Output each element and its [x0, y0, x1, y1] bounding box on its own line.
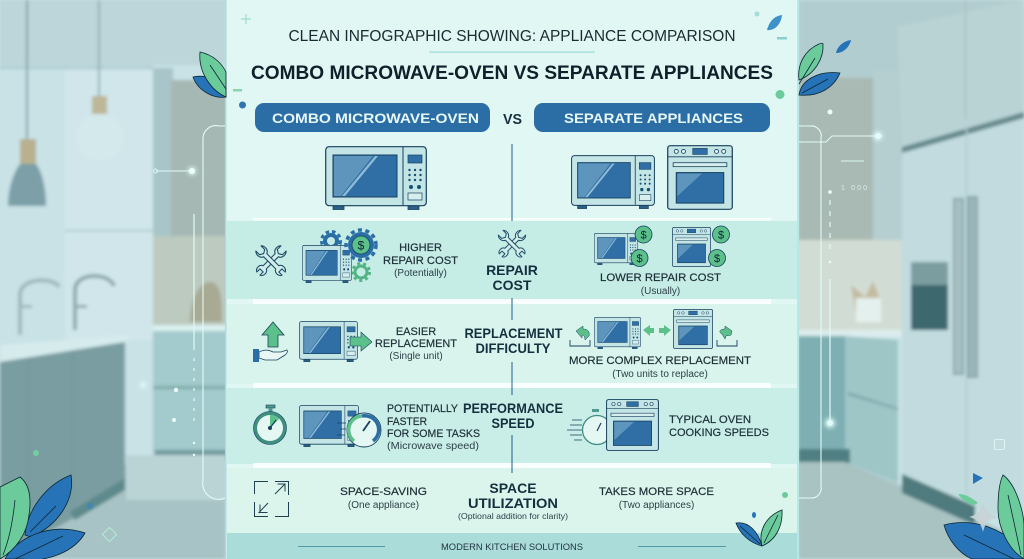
leaves bottom right	[944, 475, 1024, 559]
text: typical oven: TYPICAL OVEN	[669, 414, 751, 426]
heading: performance speed: PERFORMANCE	[463, 400, 563, 416]
text: typical oven: COOKING SPEEDS	[669, 427, 769, 439]
icon: microwave and oven with coins	[594, 226, 730, 267]
text: takes more space: TAKES MORE SPACE	[599, 486, 714, 498]
column header: separate	[534, 103, 770, 132]
text: more complex replacement: (Two units to replace)	[612, 369, 708, 380]
text: potentially faster: (Microwave speed)	[387, 441, 479, 452]
title: COMBO MICROWAVE-OVEN VS SEPARATE APPLIANCES	[251, 63, 773, 84]
icon: microwave and oven with coins: $	[640, 230, 647, 242]
text: typical oven	[669, 414, 769, 439]
text: potentially faster: POTENTIALLY	[387, 403, 459, 415]
leaves inside panel bottom right	[736, 492, 788, 546]
text: easier replacement: (Single unit)	[389, 351, 443, 362]
subtitle rule	[429, 52, 595, 53]
leaves top right	[799, 40, 851, 95]
row: replacement difficulty	[253, 309, 751, 380]
heading: repair cost: COST	[493, 277, 532, 293]
icon: microwave with arrow	[299, 321, 372, 362]
column header: separate: SEPARATE APPLIANCES	[564, 110, 743, 126]
heading: space utilization	[458, 480, 568, 521]
star sparkle	[969, 502, 997, 532]
neon HUD frame left	[33, 126, 227, 542]
text: lower repair cost: LOWER REPAIR COST	[600, 272, 721, 284]
subtitle: CLEAN INFOGRAPHIC SHOWING: APPLIANCE COMPARISON	[288, 28, 736, 45]
icon: center wrenches	[497, 229, 527, 259]
icon: expand arrows	[254, 482, 288, 516]
column header: combo	[255, 103, 490, 132]
icon: two units replacement with arrows	[570, 309, 737, 349]
icon: microwave with gauge	[299, 405, 381, 447]
text: higher repair cost	[383, 242, 458, 279]
text: easier replacement: REPLACEMENT	[375, 338, 457, 350]
text: higher repair cost: REPAIR COST	[383, 255, 458, 267]
icon: stopwatch	[254, 405, 286, 444]
text: more complex replacement: MORE COMPLEX REPLACEMENT	[569, 355, 751, 367]
footer: MODERN KITCHEN SOLUTIONS	[441, 542, 583, 553]
heading: performance speed	[463, 400, 563, 431]
neon HUD frame right	[798, 110, 1004, 498]
panel background	[225, 0, 799, 559]
icon: combo microwave	[326, 147, 426, 210]
heading: space utilization: UTILIZATION	[468, 495, 558, 511]
heading: repair cost: REPAIR	[486, 262, 538, 278]
vs label: VS	[503, 111, 522, 128]
row: performance speed	[254, 400, 769, 452]
heading: space utilization: SPACE	[489, 480, 537, 496]
heading: replacement difficulty: DIFFICULTY	[476, 340, 551, 356]
text: takes more space: (Two appliances)	[619, 500, 694, 511]
text: potentially faster: FOR SOME TASKS	[387, 428, 480, 440]
icon: stopwatch and oven	[567, 400, 658, 450]
text: lower repair cost: (Usually)	[641, 286, 680, 297]
icon: hand with up arrow	[253, 322, 287, 362]
text: potentially faster	[387, 403, 480, 452]
heading: replacement difficulty	[464, 325, 563, 356]
heading: space utilization: (Optional addition for clarity)	[458, 511, 568, 521]
leaves bottom left	[0, 475, 85, 559]
divider line center	[511, 144, 513, 473]
icon: microwave with gears: $	[358, 238, 365, 252]
panel decorations	[233, 12, 787, 108]
heading: performance speed: SPEED	[492, 415, 534, 431]
text: lower repair cost	[600, 272, 721, 297]
row: space utilization	[254, 480, 714, 521]
icon: wrenches	[255, 245, 287, 277]
text: higher repair cost: HIGHER	[399, 242, 442, 254]
icon: microwave with gears	[302, 230, 376, 283]
text: space-saving: (One appliance)	[348, 500, 419, 511]
icon: microwave and oven with coins: $	[718, 230, 724, 242]
icon: separate microwave and oven	[572, 146, 732, 209]
text: more complex replacement	[569, 355, 751, 380]
text: higher repair cost: (Potentially)	[394, 268, 447, 279]
text: potentially faster: FASTER	[387, 416, 427, 428]
row: repair cost	[255, 226, 729, 297]
text: easier replacement	[375, 326, 457, 362]
HUD number: 1 000	[841, 185, 867, 192]
leaves top left	[193, 52, 226, 97]
text: space-saving: SPACE-SAVING	[340, 486, 427, 498]
text: takes more space	[599, 486, 714, 511]
text: space-saving	[340, 486, 427, 511]
column header: combo: COMBO MICROWAVE-OVEN	[272, 110, 479, 126]
icon: microwave and oven with coins: $	[714, 253, 720, 265]
heading: repair cost	[486, 262, 538, 293]
heading: replacement difficulty: REPLACEMENT	[464, 325, 563, 341]
icon: microwave and oven with coins: $	[636, 253, 643, 265]
text: easier replacement: EASIER	[396, 326, 436, 338]
